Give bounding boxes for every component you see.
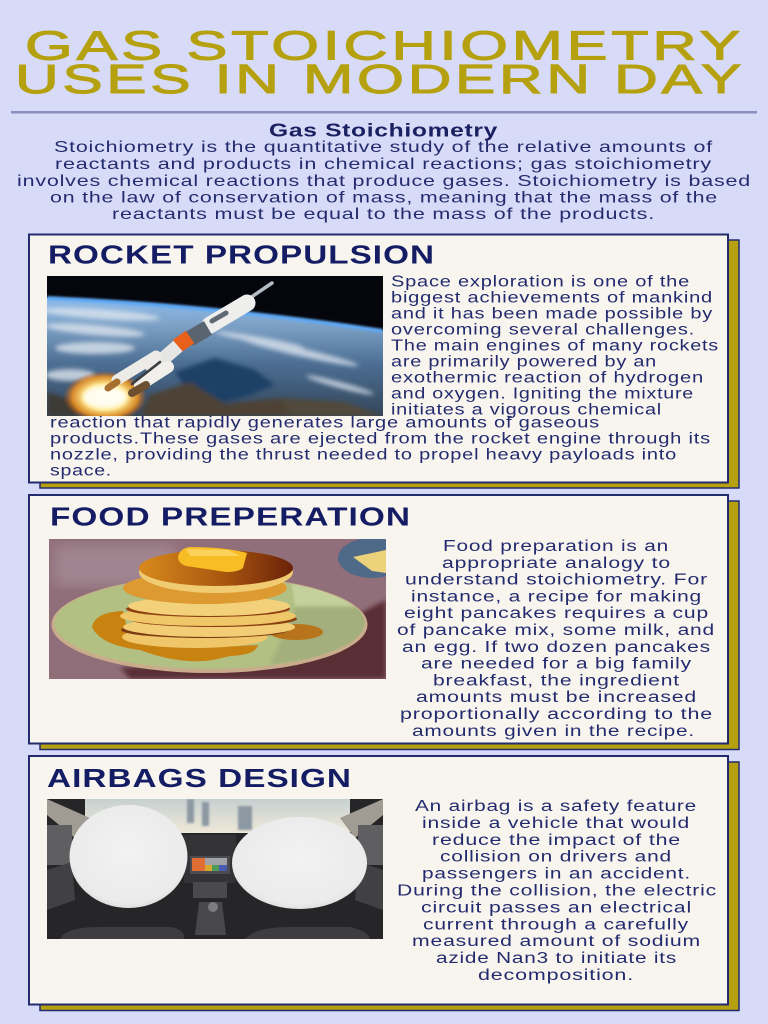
text: rocket propulsion paragraph: are primarily powered by an [391, 354, 657, 370]
text: rocket propulsion paragraph: and oxygen. Igniting the mixture [391, 386, 694, 402]
heading: food preperation: FOOD PREPERATION [50, 504, 411, 532]
heading: rocket propulsion: ROCKET PROPULSION [48, 242, 435, 270]
image: car airbags [47, 799, 383, 939]
text: food preparation paragraph: amounts must be increased [416, 689, 697, 706]
text: food preparation paragraph [397, 538, 715, 740]
panel: food preparation [29, 495, 739, 750]
image: rocket over earth [40, 276, 383, 423]
panel: airbags design [29, 756, 739, 1010]
text: food preparation paragraph: eight pancakes requires a cup [404, 605, 709, 622]
text: rocket propulsion paragraph: exothermic reaction of hydrogen [391, 370, 704, 386]
text: food preparation paragraph: an egg. If two dozen pancakes [402, 639, 711, 656]
title: USES IN MODERN DAY [15, 56, 745, 102]
text: airbags paragraph [397, 798, 717, 984]
text: airbags paragraph: collision on drivers and [440, 849, 672, 866]
title [15, 22, 745, 102]
text: rocket propulsion paragraph: products.These gases are ejected from the rocket engine through its [50, 430, 711, 448]
text: rocket propulsion paragraph: overcoming several challenges. [391, 322, 695, 339]
text: airbags paragraph: reduce the impact of the [432, 832, 681, 849]
text: airbags paragraph: passengers in an accident. [422, 866, 691, 883]
intro paragraph: reactants and products in chemical reactions; gas stoichiometry [55, 156, 712, 173]
intro paragraph: Stoichiometry is the quantitative study of the relative amounts of [54, 139, 713, 156]
text: rocket propulsion paragraph: space. [50, 462, 112, 480]
text: rocket propulsion paragraph: reaction that rapidly generates large amounts of gaseous [50, 414, 600, 432]
text: food preparation paragraph: are needed for a big family [421, 656, 692, 673]
text: airbags paragraph: azide Nan3 to initiate its [436, 950, 677, 967]
text: food preparation paragraph: of pancake mix, some milk, and [397, 622, 715, 639]
text: food preparation paragraph: appropriate analogy to [442, 555, 671, 572]
text: rocket propulsion paragraph [50, 274, 719, 480]
text: food preparation paragraph: proportionally according to the [400, 706, 713, 723]
text: food preparation paragraph: understand stoichiometry. For [405, 572, 708, 589]
text: airbags paragraph: inside a vehicle that would [422, 815, 690, 832]
text: airbags paragraph: circuit passes an electrical [421, 899, 692, 916]
text: rocket propulsion paragraph: biggest achievements of mankind [391, 290, 713, 307]
text: airbags paragraph: An airbag is a safety feature [415, 798, 697, 815]
heading: gas stoichiometry: Gas Stoichiometry [269, 120, 498, 140]
text: food preparation paragraph: amounts given in the recipe. [412, 723, 695, 740]
title: GAS STOICHIOMETRY [25, 22, 744, 68]
text: rocket propulsion paragraph: and it has been made possible by [391, 306, 713, 323]
text: rocket propulsion paragraph: nozzle, providing the thrust needed to propel heavy payloads into [50, 446, 677, 464]
text: airbags paragraph: current through a carefully [423, 916, 689, 933]
panel: rocket propulsion [29, 234, 739, 488]
text: rocket propulsion paragraph: The main engines of many rockets [391, 338, 719, 355]
text: rocket propulsion paragraph: Space exploration is one of the [391, 274, 690, 291]
intro paragraph [17, 139, 751, 223]
text: airbags paragraph: measured amount of sodium [412, 933, 701, 950]
text: rocket propulsion paragraph: initiates a vigorous chemical [391, 402, 662, 418]
heading: airbags design: AIRBAGS DESIGN [47, 765, 352, 793]
intro paragraph: on the law of conservation of mass, meaning that the mass of the [50, 190, 718, 206]
image: pancakes [49, 538, 406, 679]
text: food preparation paragraph: Food preparation is an [443, 538, 669, 555]
intro paragraph: reactants must be equal to the mass of the products. [112, 206, 655, 223]
text: airbags paragraph: During the collision, the electric [397, 882, 717, 900]
text: food preparation paragraph: breakfast, the ingredient [433, 672, 680, 689]
intro paragraph: involves chemical reactions that produce gases. Stoichiometry is based [17, 173, 751, 190]
text: airbags paragraph: decomposition. [478, 967, 634, 984]
text: food preparation paragraph: instance, a recipe for making [411, 588, 702, 605]
